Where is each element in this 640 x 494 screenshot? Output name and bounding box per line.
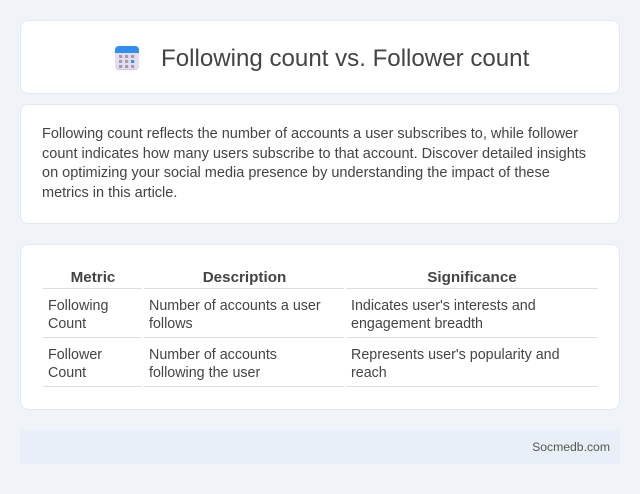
footer text: Socmedb.com xyxy=(532,440,610,454)
row 2 metric: Follower xyxy=(48,347,102,363)
title: Following count vs. Follower count xyxy=(161,45,529,72)
intro panel xyxy=(20,104,620,224)
header card xyxy=(20,20,620,94)
row 2 description xyxy=(149,347,277,381)
row 1 significance: engagement breadth xyxy=(351,316,483,332)
intro text: metrics in this article. xyxy=(42,184,177,200)
intro text: count indicates how many users subscribe to that account. Discover detailed insights xyxy=(42,146,586,162)
footer bar xyxy=(20,430,620,464)
row 1 metric: Following xyxy=(48,298,108,314)
intro text: Following count reflects the number of accounts a user subscribes to, while follower xyxy=(42,126,578,142)
row 2 significance: Represents user's popularity and xyxy=(351,347,560,363)
row 1 description: Number of accounts a user xyxy=(149,298,321,314)
icon: calendar xyxy=(115,46,139,70)
row 2 metric xyxy=(48,347,102,381)
row 2 significance: reach xyxy=(351,365,387,381)
header: Metric: Metric xyxy=(71,269,115,286)
row 2 description: following the user xyxy=(149,365,260,381)
row 2 description: Number of accounts xyxy=(149,347,277,363)
row 1 significance xyxy=(351,298,536,332)
row 1 description xyxy=(149,298,321,332)
header: Significance: Significance xyxy=(427,269,517,286)
header: Description: Description xyxy=(203,269,286,286)
row 1 metric: Count xyxy=(48,316,86,332)
intro text: on optimizing your social media presence by understanding the impact of these xyxy=(42,165,550,181)
intro text xyxy=(42,126,586,200)
row 1 description: follows xyxy=(149,316,193,332)
row 1 metric xyxy=(48,298,108,332)
row 2 significance xyxy=(351,347,560,381)
row 1 significance: Indicates user's interests and xyxy=(351,298,536,314)
row 2 metric: Count xyxy=(48,365,86,381)
table panel xyxy=(20,244,620,410)
